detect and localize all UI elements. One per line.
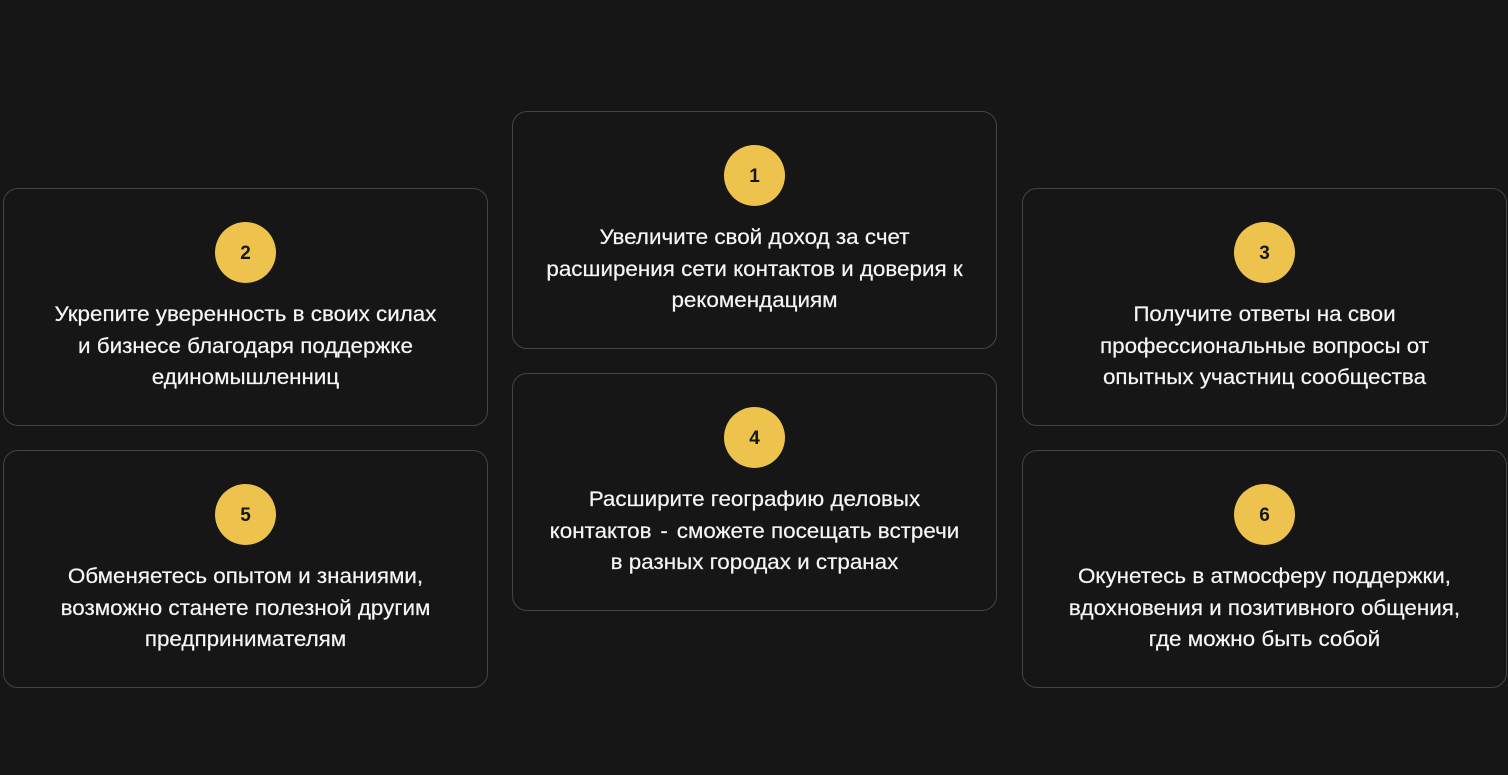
number badge 2 (215, 222, 276, 283)
text 5: предпринимателям (145, 628, 346, 651)
card 2 (3, 188, 488, 426)
card 1 (512, 111, 997, 349)
number badge 6: 6 (1259, 505, 1270, 526)
text 5: возможно станете полезной другим (61, 596, 430, 620)
number badge 6 (1234, 484, 1295, 545)
text 6: Окунетесь в атмосферу поддержки, (1078, 565, 1451, 588)
text 4: в разных городах и странах (611, 551, 898, 574)
text 4: Расширите географию деловых (589, 488, 920, 511)
text 3 (1100, 303, 1429, 389)
text 4 (550, 488, 959, 574)
number badge 2: 2 (240, 243, 251, 264)
number badge 4: 4 (749, 428, 760, 449)
card 4 (512, 373, 997, 611)
text 6: вдохновения и позитивного общения, (1069, 596, 1460, 620)
text 6: где можно быть собой (1149, 628, 1380, 651)
card 3 (1022, 188, 1507, 426)
number badge 1 (724, 145, 785, 206)
text 1: рекомендациям (671, 289, 838, 312)
number badge 1: 1 (749, 166, 760, 187)
text 3: профессиональные вопросы от (1100, 334, 1429, 358)
text 2: единомышленниц (152, 366, 339, 389)
text 3: опытных участниц сообщества (1103, 366, 1426, 389)
text 3: Получите ответы на свои (1133, 303, 1396, 326)
number badge 5: 5 (240, 505, 251, 526)
number badge 4 (724, 407, 785, 468)
text 1: расширения сети контактов и доверия к (546, 258, 963, 280)
text 4: контактов - сможете посещать встречи (550, 520, 959, 542)
text 2: и бизнесе благодаря поддержке (78, 334, 413, 358)
text 1: Увеличите свой доход за счет (600, 226, 909, 249)
number badge 3 (1234, 222, 1295, 283)
number badge 5 (215, 484, 276, 545)
text 5 (61, 565, 430, 651)
text 2: Укрепите уверенность в своих силах (55, 303, 436, 326)
text 1 (546, 226, 963, 312)
text 5: Обменяетесь опытом и знаниями, (68, 565, 423, 588)
card 6 (1022, 450, 1507, 688)
text 2 (54, 303, 436, 389)
number badge 3: 3 (1259, 243, 1270, 264)
card 5 (3, 450, 488, 688)
text 6 (1069, 565, 1460, 651)
